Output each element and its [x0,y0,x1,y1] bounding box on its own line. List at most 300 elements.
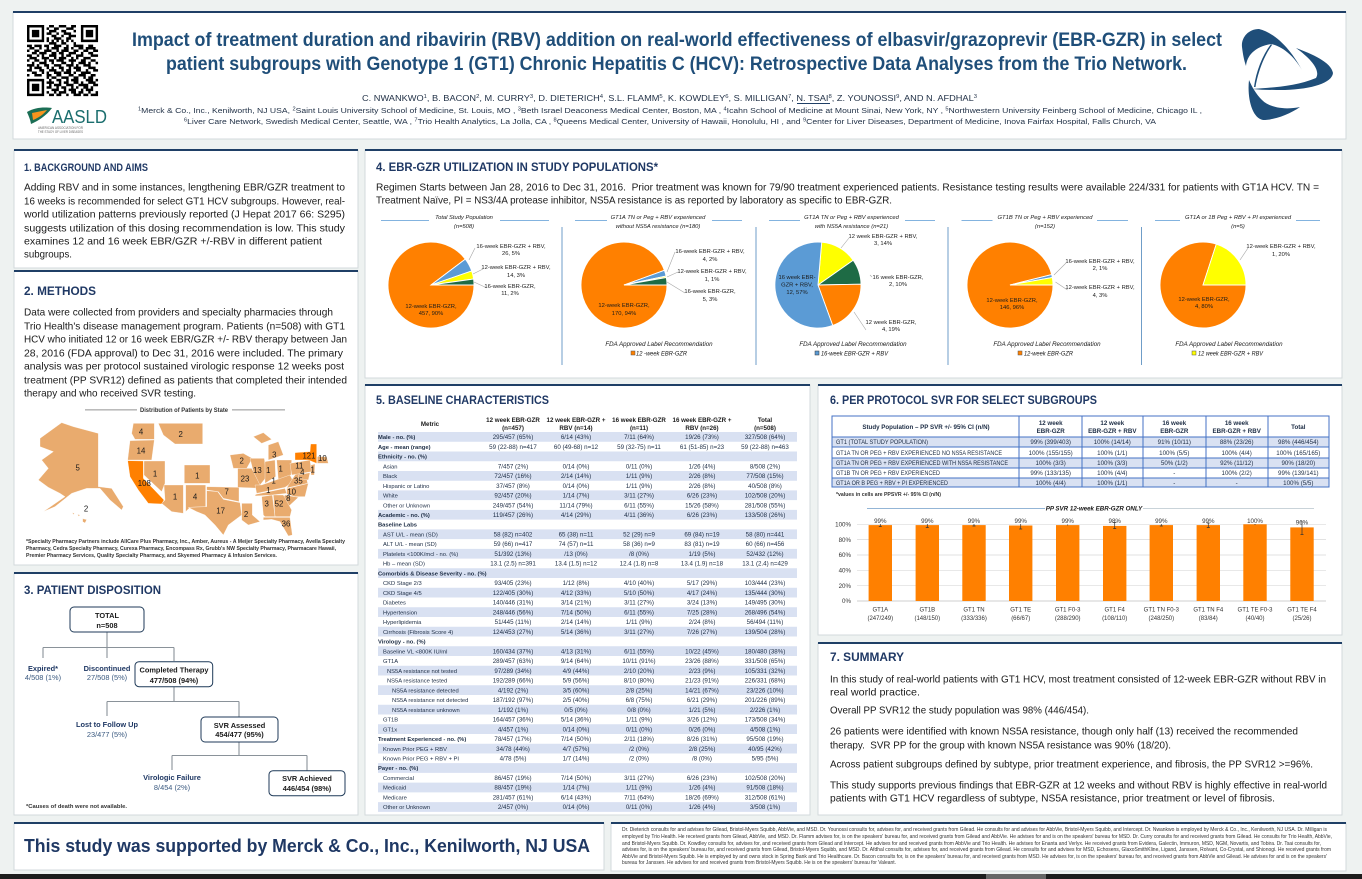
pie chart: total study population: 16-week EBR-GZR + RBV, [476,244,546,250]
authors: 4 [600,94,603,100]
authors: 6 [725,94,729,100]
text block [830,674,1327,804]
table rows: GT1A [383,659,398,665]
pie chart: total study population: (n=508) [454,224,474,230]
pie chart: GT1B: 12-week EBR-GZR, [986,298,1038,304]
table rows: 4/457 (1%) [498,726,528,733]
label: virologic failure: Virologic Failure [143,773,201,782]
table rows: Treatment Experienced - no. (%) [378,737,466,743]
map: state counts: 2 [244,510,248,519]
table rows: 281/508 (55%) [745,502,785,509]
table rows: /8 (0%) [692,756,712,762]
table rows: Virology - no. (%) [378,640,426,646]
table header: Total [1291,424,1306,431]
box: SVR assessed [201,717,278,742]
table rows: 2/8 (25%) [689,746,715,753]
table rows: 6/26 (23%) [687,775,717,782]
map: state counts: 14 [137,446,146,455]
value labels: 99% [1155,518,1168,525]
map: state counts: 7 [224,487,229,496]
table header: 16 week [1162,420,1187,427]
table rows: 4/11 (36%) [624,512,654,519]
map: state counts: 1 [195,472,200,481]
table rows: GT1B TN OR PEG + RBV EXPERIENCED [836,471,941,477]
error bars [879,521,1304,534]
table rows: 7/11 (64%) [624,434,654,441]
table rows: 59 (32-75) n=11 [617,444,661,451]
label: discontinued: Discontinued [84,664,131,673]
table rows: Age - mean (range) [378,445,431,451]
value labels: 96% [1296,520,1309,526]
table rows: 18/26 (69%) [685,794,719,802]
x axis labels: GT1B [919,608,935,614]
chart title: distribution by state: Distribution of Patients by State [140,407,229,414]
table rows: 1/11 (9%) [626,716,652,724]
table rows: 78/457 (17%) [494,736,532,743]
table rows: 100% (4/4) [1097,470,1127,477]
table rows: 100% (14/14) [1094,439,1131,446]
authors: , AND N. AFDHAL [899,93,974,103]
table rows: 187/192 (97%) [493,697,533,704]
pie chart: GT1A or 1B PI experienced: 12-week EBR-GZR, [1178,297,1230,303]
table rows: 0/14 (0%) [563,726,589,733]
table rows: 3/26 (12%) [687,716,717,724]
value labels: 98% [1109,518,1121,525]
value labels: 99% [1015,518,1027,525]
label: discontinued [84,664,131,682]
text block: subgroups. [24,248,72,260]
header panel [13,11,1346,139]
table rows: 40/95 (42%) [748,746,782,753]
table rows: 99% (399/403) [1030,439,1071,446]
table rows: 4/13 (31%) [561,648,591,655]
table rows: NS5A resistance unknown [392,708,460,714]
table rows: 5/95 (5%) [752,756,778,762]
pie chart: GT1B: GT1B TN or Peg + RBV experienced [998,215,1093,221]
table header [421,417,776,432]
table rows: 124/453 (27%) [493,629,533,636]
text block: 26 patients were identified with known NS5A resistance, though only half (13) received the recommended [830,726,1298,738]
map: state counts: 3 [264,500,269,509]
table rows: 6/26 (23%) [687,492,717,500]
table rows: 51/445 (11%) [495,619,531,626]
table header: Study Population – PP SVR +/- 95% CI (n/N) [862,424,990,431]
table rows: 4/9 (44%) [563,668,589,675]
map: state counts: 36 [282,520,291,529]
pie chart: GT1A without NS5A resistance: 16-week EBR-GZR + RBV, [675,249,745,255]
table rows: /2 (0%) [629,746,649,753]
table rows: 1/26 (4%) [689,785,715,792]
table rows: 102/508 (20%) [745,492,785,500]
table rows: 1/19 (5%) [689,551,715,558]
table rows: 65 (38) n=11 [559,532,594,538]
text block: suggests utilization of this dosing recommendation is low. This study [24,222,346,234]
pie chart: GT1A or 1B PI experienced: GT1A or 1B Peg + RBV + PI experienced [1185,215,1292,221]
map: state counts: 1 [153,470,157,479]
table rows: Hypertension [383,610,417,616]
table header: 12 week EBR-GZR + [547,417,606,424]
map: state counts: 11 [295,462,303,471]
table header: 16 week EBR-GZR + [673,417,732,424]
text block: Overall PP SVR12 the study population was 98% (446/454). [830,704,1089,716]
pie chart: GT1A with NS5A resistance: GZR + RBV, [781,282,813,288]
table rows: 248/446 (56%) [493,609,533,616]
authors: 7 [788,94,791,100]
table rows: 2/10 (20%) [624,668,654,675]
table rows: - [1173,470,1175,477]
text block: AbbVie and Bristol-Myers Squibb. He is employed by and owns stock in Spring Bank and Trio Healthcare. Dr. Bacon consults for, is on the speakers' bureau for, and received grants from MSD. He advises for, is on the speakers' bureau for, and received grants from AbbVie and Gilead. He advises for and is on the speakers' [622,854,1327,860]
x axis labels: (83/84) [1199,616,1218,622]
table rows: 88% (23/26) [1220,439,1254,446]
heading: 3. PATIENT DISPOSITION [24,583,161,597]
table rows: 100% (2/2) [1222,470,1252,477]
table rows: 6/11 (55%) [624,609,654,616]
pie chart: GT1A or 1B PI experienced [1155,215,1320,358]
affiliations: Saint Louis University School of Medicine, St. Louis, MO , [296,106,518,115]
icon: QR code [27,26,98,95]
title [132,30,1223,75]
x axis labels: (333/336) [961,616,987,622]
pie chart: GT1A without NS5A resistance: 4, 2% [703,257,717,263]
map: state counts: 4 [139,427,144,436]
panel: disclosures [611,822,1346,871]
authors: , B. BACON [427,93,476,103]
table header: EBR-GZR + RBV [1088,428,1137,435]
table rows: 7/25 (28%) [687,609,717,616]
box: completed therapy [135,662,213,687]
table rows: 83 (81) n=19 [684,541,720,548]
table rows: 0/11 (0%) [626,726,652,733]
table header: EBR-GZR [1037,428,1065,435]
table rows: 91% (10/11) [1158,439,1191,446]
table rows: 1/14 (7%) [563,785,589,792]
text block: advises for, is on the speakers' bureau for, and received grants from Gilead, Bristol-Myers Squibb, and MSD. Dr. Afdhal consults for, advises for, and received grants from Gilead. He consults for and advises for MSD, Echosens, GlaxoSmithKline, Ligand, Janssen, Rolvant, Co-Crystal, and Shionogi. He received grants from [622,847,1331,853]
authors: 8 [828,94,832,100]
table rows: Payer - no. (%) [378,766,418,772]
table rows: 8/508 (2%) [750,463,780,470]
affiliations: 4 [724,106,727,112]
table rows: AST U/L - mean (SD) [383,532,438,538]
table rows: 6/11 (55%) [624,648,654,655]
table rows: 6/14 (43%) [561,794,591,802]
map: state counts: 10 [287,487,297,496]
table rows: 58 (36) n=9 [623,541,655,548]
table rows: 100% (5/5) [1283,480,1313,487]
authors: , S.L. FLAMM [603,93,659,103]
table rows: 23/226 (10%) [746,687,784,694]
text block: therapy. SVR PP for the group with known NS5A resistance was 90% (18/20). [830,740,1171,752]
map: state counts: 1 [266,466,271,475]
table rows: 51/392 (13%) [494,551,532,558]
table rows: 3/5 (60%) [563,687,589,694]
table rows: 15/26 (58%) [685,502,719,509]
authors: C. NWANKWO [362,93,419,103]
bars [869,524,1314,601]
x axis labels: (288/290) [1055,616,1081,622]
table rows: 19/26 (73%) [685,434,719,441]
table rows: 268/496 (54%) [745,609,785,616]
table rows: 14/21 (67%) [685,687,719,694]
table rows: 11/14 (79%) [559,502,593,509]
table rows: GT1A TN OR PEG + RBV EXPERIENCED WITH NS5A RESISTANCE [836,461,1008,467]
label: expired: 4/508 (1%) [25,673,61,682]
table rows: 135/444 (30%) [745,590,785,597]
table rows: 4/17 (24%) [687,590,717,597]
authors: 3 [530,94,533,100]
table rows: 1/11 (9%) [626,483,652,490]
pie chart: GT1A with NS5A resistance: 12 week EBR-GZR, [866,320,917,326]
table rows: 103/444 (23%) [745,580,785,587]
text block [23,182,346,260]
table rows: 100% (1/1) [1097,450,1127,457]
map: state counts: 8 [286,494,291,503]
label: lost to follow up: 23/477 (5%) [87,730,127,739]
panel: funding statement: This study was supported by Merck & Co., Inc., Kenilworth, NJ USA [24,836,590,856]
x axis labels: GT1 F4 [1105,608,1126,614]
table rows: 1/11 (9%) [626,785,652,792]
table rows: 4/12 (33%) [561,590,591,597]
table rows: Diabetes [383,601,406,607]
table rows: GT1A OR B PEG + RBV + PI EXPERIENCED [836,481,949,487]
legend: 12 -week EBR-GZR [636,350,687,358]
x axis labels: (247/249) [867,616,893,622]
map: state counts: 2 [239,456,244,465]
pie chart: GT1A with NS5A resistance: 12 week EBR-GZR + RBV, [849,234,918,240]
table rows: 312/508 (61%) [745,794,785,802]
table header: Total [758,417,772,424]
authors: , M. CURRY [479,93,530,103]
text block [622,827,1332,866]
table rows: 72/457 (16%) [494,473,532,480]
label: expired: Expired* [28,664,58,673]
affiliations: 7 [414,118,418,124]
table header: 12 week EBR-GZR [486,417,540,424]
pie chart: total study population: Total Study Population [435,215,493,221]
x axis labels: GT1A [872,608,888,614]
x axis labels: (248/250) [1148,616,1174,622]
table rows: Hispanic or Latino [383,484,429,490]
table rows: 90% (18/20) [1281,460,1315,467]
text block: treatment (PP SVR12) defined as patients that completed their intended [24,374,347,386]
x axis labels: (40/40) [1245,616,1265,622]
table rows: 12.4 (1.8) n=8 [620,561,659,568]
table rows: Commercial [383,776,414,782]
x axis labels [867,608,1317,622]
legend [993,341,1101,358]
x axis labels: (148/150) [914,616,940,622]
table header: RBV (n=14) [559,425,593,432]
table rows: 0/5 (0%) [564,707,588,714]
table rows: 173/508 (34%) [745,716,785,724]
table: SVR by subgroup [832,416,1329,487]
heading: 4. EBR-GZR UTILIZATION IN STUDY POPULATIONS* [376,160,658,174]
map: state counts: 13 [253,466,262,475]
table rows: 92% (11/12) [1220,460,1253,467]
box: SVR assessed: SVR Assessed [214,721,266,730]
x axis labels: GT1 TN F4 [1193,608,1224,614]
text block: employed by Trio Health. He received grants from Gilead, AbbVie, and MSD. Dr. Flamm advises for, is on the speakers' bureau for, and received grants from Gilead and AbbVie. He advises for and is on the speakers' bureau for MSD. Dr. Curry consults for and received grants from Gilead. He consults for Trio Health, AbbVie, [622,834,1332,840]
table rows: 91/508 (18%) [746,785,784,792]
text block: Dr. Dieterich consults for and advises for Gilead, Bristol-Myers Squibb, AbbVie, and MSD. Dr. Younossi consults for, advises for, and received grants from Gilead. He consults for and advises for AbbVie, Bristol-Myers Squibb, and Intercept. Dr. Nwankwo is employed by Merck & Co., Inc., Kenilworth, NJ USA. Dr. Milligan is [622,827,1327,833]
table rows: GT1B [383,718,398,724]
table rows: NS5A resistance not tested [387,669,457,675]
pie chart: GT1A without NS5A resistance: without NS5A resistance (n=180) [616,224,700,230]
affiliations: Trio Health Analytics, La Jolla, CA , [418,117,554,126]
text block [24,306,347,400]
table rows: 4/192 (2%) [498,687,528,694]
table rows: 58 (80) n=441 [746,532,785,538]
pie chart: GT1B: 4, 3% [1093,293,1107,299]
legend [799,341,907,358]
table rows: 40/508 (8%) [748,483,782,490]
table rows: 140/446 (31%) [493,600,533,607]
table rows: 60 (49-68) n=12 [554,444,599,451]
heading: 6. PER PROTOCOL SVR FOR SELECT SUBGROUPS [830,393,1097,407]
map: state counts: 2 [178,430,183,439]
table rows: 149/495 (30%) [745,600,785,607]
map: state counts: 23 [241,475,250,484]
pie chart: total study population: 12-week EBR-GZR, [405,304,457,310]
text block: and Bristol-Myers Squibb. Dr. Kowdley consults for, advises for, and received grants from Gilead and Intercept. He advises for and received grants from AbbVie and Trio Health. He advises for Enanta and Verlyx. He received grants from Evidera, Galectin, Immuron, MSD, NGM, Novartis, and Tobira. Dr. Tsai consults for, [622,841,1321,847]
table rows: 99% (133/135) [1030,470,1071,477]
table rows: 5/9 (56%) [563,678,589,685]
value labels: 99% [1202,518,1215,525]
text block: 28, 2016 (FDA approval) to Dec 31, 2016 were included. The primary [24,348,344,360]
table rows: 0/11 (0%) [626,463,652,470]
heading: 7. SUMMARY [830,650,904,664]
pie chart: GT1A with NS5A resistance [769,215,935,358]
table rows: Male - no. (%) [378,435,415,441]
map: patients by state [38,423,328,536]
map: state counts: 1 [271,477,276,486]
pie chart: GT1A with NS5A resistance: 2, 10% [889,282,907,288]
table rows: Medicare [383,796,407,802]
text block: Data were collected from providers and specialty pharmacies through [24,306,333,318]
table rows: 7/14 (50%) [561,609,591,616]
table rows: Academic - no. (%) [378,513,430,519]
table rows: 0/14 (0%) [563,483,589,490]
value labels: 99% [874,518,887,525]
affiliations: Beth Israel Deaconess Medical Center, Boston, MA , [521,106,724,115]
table rows: 37/457 (8%) [496,483,530,490]
legend: 12-week EBR-GZR [1024,350,1073,358]
pie chart: GT1A with NS5A resistance: 3, 14% [874,241,892,247]
table rows: 7/14 (50%) [561,775,591,782]
affiliations: 5 [945,106,949,112]
table rows: 7/11 (64%) [624,794,654,802]
table rows: 99% (139/141) [1278,470,1319,477]
table rows: 2/226 (1%) [750,707,780,714]
table rows: 98% (446/454) [1278,439,1319,446]
box: completed therapy: Completed Therapy [140,666,209,674]
table rows: GT1x [383,727,397,733]
pie chart: GT1A without NS5A resistance: 5, 3% [703,297,717,303]
table rows: 3/11 (27%) [624,600,654,607]
table rows: 100% (1/1) [1097,480,1127,487]
table rows: 3/11 (27%) [624,629,654,636]
table rows: 7/14 (50%) [561,736,591,743]
x axis labels: GT1 TN [963,608,985,614]
text block: Trio Health's disease management program. Patients (n=508) with GT1 [24,320,345,332]
map: state counts: 2 [84,505,88,514]
table rows: 6/14 (43%) [561,434,591,441]
panel: funding statement [14,822,604,870]
table rows: Hyperlipidemia [383,620,422,626]
table rows: 289/457 (63%) [493,658,533,665]
table rows: 13.1 (2.5) n=391 [490,561,536,568]
table rows: 88/457 (19%) [494,785,532,792]
table rows: 2/8 (25%) [626,687,652,694]
table rows: Baseline Labs [378,523,417,529]
table rows: Hb – mean (SD) [383,562,425,568]
table rows: Platelets <100K/mcl - no. (%) [383,552,458,558]
pie chart: total study population: 14, 3% [507,273,525,279]
map: state counts: 1 [173,492,177,501]
pie chart: GT1A with NS5A resistance: 16 week EBR- [778,275,816,281]
table rows: 4/10 (40%) [624,580,654,587]
label: virologic failure [143,773,201,792]
table rows: 2/26 (8%) [689,483,715,490]
table rows: 58 (82) n=402 [494,532,533,538]
table rows: 2/14 (14%) [561,473,591,480]
text block: Across patient subgroups defined by subtype, prior treatment experience, and fibrosis, the PP SVR12 >=96%. [830,758,1313,770]
map: state counts: 3 [272,451,277,460]
table rows: 52 (29) n=9 [623,532,655,538]
table rows: 23/26 (88%) [685,658,719,665]
bar chart: PP SVR 12-week EBR-GZR only: PP SVR 12-week EBR-GZR ONLY [1046,506,1143,512]
footnote: pharmacy partners: Pharmacy, Cedra Specialty Pharmacy, Curexa Pharmacy, Encompass Rx, Grubb's NW Specialty Pharmacy, Pharmacare Hawaii, [26,546,336,552]
value labels [874,518,1309,526]
table rows: 2/23 (9%) [689,668,715,675]
pie chart: GT1A or 1B PI experienced: 12-week EBR-GZR + RBV, [1246,244,1316,250]
table rows: 10/11 (91%) [622,658,656,665]
box: SVR assessed: 454/477 (95%) [215,730,264,739]
affiliations: 8 [554,118,557,124]
affiliations: Merck & Co., Inc., Kenilworth, NJ USA, [141,106,292,115]
table rows: 95/508 (19%) [746,736,784,743]
flowchart connectors [43,632,307,771]
legend [605,341,713,358]
x axis labels: GT1 TE [1010,608,1031,614]
y axis labels: 40% [839,568,851,574]
table rows: 1/7 (14%) [563,756,589,762]
table rows: 331/508 (65%) [745,658,785,665]
pie chart: GT1A or 1B PI experienced: 1, 20% [1272,252,1290,258]
text block: bureau for Janssen. He advises for and received grants from Bristol-Myers Squibb. He is on the speakers' bureau for Valeant. [622,860,896,866]
table rows: 6/21 (29%) [687,697,717,704]
map: state counts: 121 [302,451,316,460]
table rows: 1/21 (5%) [689,707,715,714]
y axis labels: 100% [835,522,851,528]
table rows: 100% (3/3) [1097,460,1127,467]
table rows: 100% (155/155) [1029,450,1073,457]
map: state counts: 35 [294,477,303,486]
table rows: 13.4 (1.5) n=12 [555,561,598,568]
table header: RBV (n=26) [685,425,719,432]
table rows: Known Prior PEG + RBV + PI [383,756,459,762]
value labels: 100% [1247,518,1263,525]
text block: therapy and who received SVR testing. [24,388,196,400]
table rows: 92/457 (20%) [494,492,532,500]
panel: 4. utilization [365,149,1342,378]
heading: 2. METHODS [24,284,96,298]
table header: Metric [421,421,440,428]
table rows: 133/508 (26%) [745,512,785,519]
pie chart: total study population: 16-week EBR-GZR, [484,284,536,290]
map: state counts: 108 [138,479,152,488]
panel: 1. background and aims [14,149,358,268]
pie chart: GT1A with NS5A resistance: 12, 57% [786,290,808,296]
